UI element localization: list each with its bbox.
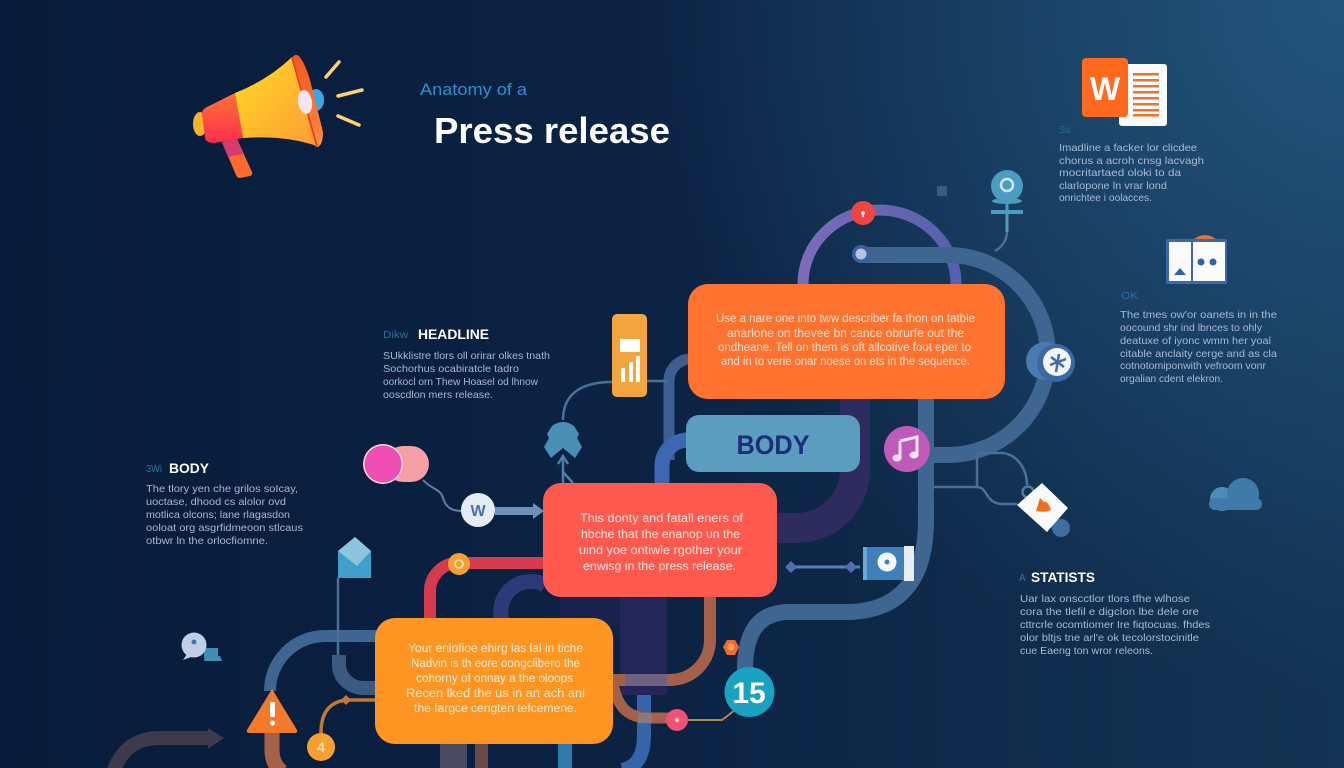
icon: word document: W xyxy=(1090,71,1121,107)
statists label: A xyxy=(1019,573,1026,584)
icon: webcam pin xyxy=(991,170,1023,232)
statists copy: cttrcrle ocomtiomer Ire fiqtocuas. fhdes xyxy=(1020,619,1210,631)
orange connector xyxy=(321,700,375,733)
top right label: Su xyxy=(1059,125,1070,136)
lower blue pipe xyxy=(622,695,644,768)
indigo arc pipe xyxy=(501,581,545,620)
headline label: Dikw xyxy=(383,330,409,341)
icon: red node xyxy=(851,201,875,225)
text block: body xyxy=(146,460,303,547)
top right copy: onrichtee i oolacces. xyxy=(1059,192,1152,204)
card: orange intro xyxy=(688,284,1005,399)
card text: uind yoe ontiwle rgother your xyxy=(579,545,742,557)
icon: open folder card xyxy=(1166,235,1227,284)
card text: and in to verie onar noese on ets in the sequence. xyxy=(721,356,970,368)
body heading: BODY xyxy=(169,460,210,476)
card text: Your enlofioe ehirg las lal in tiche xyxy=(408,643,583,655)
text block: top right xyxy=(1059,125,1204,204)
icon: disc tile xyxy=(785,546,914,581)
blue grey loop pipe xyxy=(862,255,1048,455)
body copy: otbwr ln the orlocfiomne. xyxy=(146,535,268,547)
headline copy xyxy=(383,350,550,401)
pipe left of orange card xyxy=(669,359,690,460)
card text: anarlone on thevee bn cance obrurfe out the xyxy=(727,328,964,340)
top right copy xyxy=(1059,142,1204,204)
title xyxy=(420,80,670,151)
mid right copy: oocound shr ind lbnces to ohly xyxy=(1120,322,1263,334)
lower brown pipe xyxy=(613,684,677,718)
mid right copy: deatuxe of iyonc wmm her yoal xyxy=(1120,335,1271,347)
thin orange line to 15 xyxy=(688,710,735,720)
purple arch pipe xyxy=(803,210,956,285)
number badge: 15: 15 xyxy=(732,677,766,710)
mid right copy: The tmes ow'or oanets in in the xyxy=(1120,309,1277,321)
label pill: body xyxy=(686,415,860,472)
line to disc icon xyxy=(795,566,860,568)
body label: 3Wi xyxy=(146,464,162,475)
connector marker xyxy=(341,695,351,705)
card text: enwisg in the press release. xyxy=(583,561,736,573)
pipe crossing tints xyxy=(625,674,667,723)
icon: cloud xyxy=(1209,478,1262,511)
card text xyxy=(406,643,585,715)
text block: headline xyxy=(383,326,550,401)
headline copy: oorkocl orn Thew Hoasel od lhnow xyxy=(383,376,538,388)
card text: Use a nare one into tww describer fa thon on tatble xyxy=(716,313,975,325)
icon: word document xyxy=(1082,58,1167,126)
mid right copy: cotnotomiponwith vefroom vonr xyxy=(1120,360,1267,372)
card text xyxy=(579,513,744,573)
headline heading: HEADLINE xyxy=(418,326,489,342)
mid right copy: citable anclaity cerge and as cla xyxy=(1120,348,1277,360)
arrow: bottom left xyxy=(113,728,224,768)
top right copy: Imadline a facker lor clicdee xyxy=(1059,142,1197,154)
headline copy: SUkklistre tlors oll orirar olkes tnath xyxy=(383,350,550,362)
top right copy: chorus a acroh cnsg lacvagh xyxy=(1059,155,1204,167)
number badge: 15 xyxy=(724,667,774,717)
text block: statists xyxy=(1019,569,1210,657)
text block: mid right xyxy=(1120,291,1277,385)
body copy: The tlory yen che grilos soIcay, xyxy=(146,483,298,495)
statists copy: cora the tlefil e digclon lbe dele ore xyxy=(1020,606,1199,618)
sound rays xyxy=(326,62,362,125)
statists heading: STATISTS xyxy=(1031,569,1095,585)
thin connectors xyxy=(338,200,1027,655)
card text: cohorny of onnay a the oloops xyxy=(416,673,573,685)
card: orange lower xyxy=(375,618,613,744)
top right copy: clarlopone ln vrar lond xyxy=(1059,180,1167,192)
icon: music note xyxy=(884,426,930,472)
short bend pipe xyxy=(339,655,378,688)
body copy: motlica olcons; lane rlagasdon xyxy=(146,509,290,521)
arrow up to crest xyxy=(558,456,573,483)
icon: small orange node xyxy=(448,553,470,575)
headline copy: Sochorhus ocabiratcle tadro xyxy=(383,363,519,375)
icon: number 4 node: 4 xyxy=(317,739,325,755)
wire from pill xyxy=(423,480,463,511)
bottom stubs xyxy=(440,744,572,768)
icon: crest xyxy=(544,422,582,458)
icon: W circle xyxy=(461,493,495,527)
icon: pink pill xyxy=(363,444,429,484)
card: coral body xyxy=(543,483,777,597)
brown pipe from coral card xyxy=(613,597,710,680)
icon: pink node xyxy=(666,709,688,731)
body copy xyxy=(146,483,303,547)
icon: gear node xyxy=(1026,342,1075,382)
top right copy: mocritartaed oloki to da xyxy=(1059,167,1181,179)
body copy: ooloat org asgrfidmeoon stlcaus xyxy=(146,522,303,534)
purple backing pipe xyxy=(770,399,855,528)
card text xyxy=(716,313,975,368)
statists copy xyxy=(1020,593,1210,657)
card text: Nadvin is th eore oongclibero the xyxy=(411,658,580,670)
icon: number 4 node xyxy=(307,733,335,761)
icon: heart tag xyxy=(1017,483,1070,537)
card text: Recen lked the us in an ach anl xyxy=(406,688,585,700)
main title: Press release xyxy=(434,110,670,151)
arrow from webcircle xyxy=(495,503,544,519)
body copy: uoctase, dhood cs alolor ovd xyxy=(146,496,286,508)
long vertical pipe xyxy=(745,399,926,670)
dark backing column xyxy=(560,597,667,695)
icon: pipe start node xyxy=(852,245,870,263)
upper left pipe xyxy=(270,636,378,691)
mid right copy: orgalian cdent elekron. xyxy=(1120,373,1223,385)
mid right label: OK xyxy=(1121,291,1138,302)
icon: orange hex node xyxy=(723,640,739,655)
flow pipes xyxy=(270,200,1048,768)
purple column tint xyxy=(620,597,667,695)
mid right copy xyxy=(1120,309,1277,385)
icon: chat bubbles xyxy=(182,632,222,661)
statists copy: cue Eaeng ton wror releons. xyxy=(1020,645,1153,657)
card text: the fargce cengten tefcemene. xyxy=(414,703,577,715)
statists copy: Uar lax onscctlor tlors tfhe wlhose xyxy=(1020,593,1190,605)
brown pipe below warning xyxy=(272,730,282,768)
icon: megaphone xyxy=(193,55,362,178)
card text: hbche that the enanop un the xyxy=(581,529,740,541)
card text: This donty and fatall eners of xyxy=(580,513,744,525)
blue arc from body pill xyxy=(662,440,688,486)
headline copy: ooscdlon mers release. xyxy=(383,389,493,401)
statists copy: olor bltjs tne arl'e ok tecolorstocinitle xyxy=(1020,632,1199,644)
icon: warning triangle xyxy=(247,689,297,733)
icon: small square xyxy=(937,186,947,196)
icon: bar chart tile xyxy=(612,314,647,397)
label pill: body: BODY xyxy=(736,430,810,460)
icon: envelope box xyxy=(338,537,371,578)
card text: ondheane. Tell on them is oft allcotive foot eper to xyxy=(718,342,971,354)
red pipe xyxy=(430,563,545,618)
icon: W circle: W xyxy=(470,503,486,520)
title kicker: Anatomy of a xyxy=(420,80,528,99)
